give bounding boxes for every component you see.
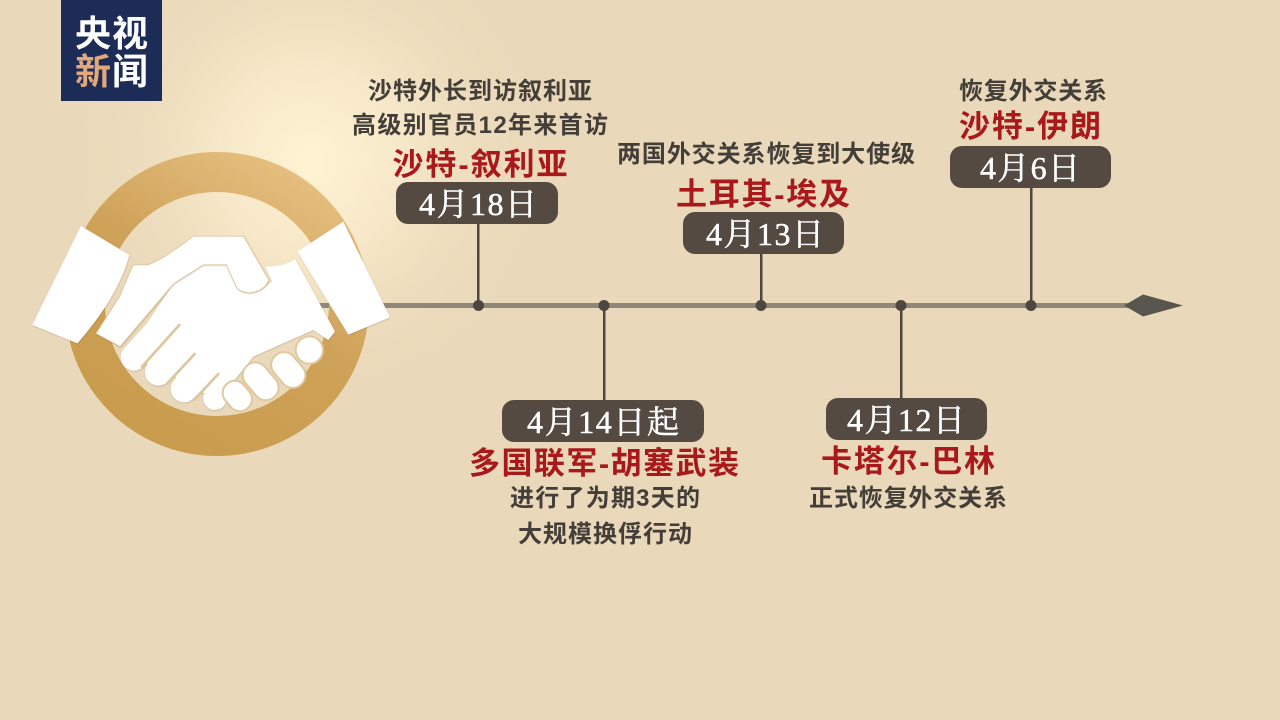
event: Qatar-Bahrain April 12: 4月12日 — [847, 402, 965, 438]
event: Saudi-Iran April 6: 沙特-伊朗 — [959, 109, 1101, 144]
logo: CCTV news — [61, 0, 162, 101]
event: Qatar-Bahrain April 12: 卡塔尔-巴林 — [821, 444, 995, 479]
logo: CCTV news: 新 — [75, 51, 111, 92]
icon: handshake in ring — [32, 172, 390, 436]
event: Turkey-Egypt April 13: 两国外交关系恢复到大使级 — [617, 140, 915, 168]
event: Qatar-Bahrain April 12 — [809, 300, 1007, 512]
event: Coalition-Houthi from April 14: 进行了为期3天的 — [510, 485, 700, 512]
event: Coalition-Houthi from April 14: 4月14日起 — [527, 404, 679, 440]
right cuff — [297, 222, 390, 335]
event: Saudi-Iran April 6 — [950, 77, 1111, 311]
gold ring — [85, 172, 349, 436]
event: Saudi-Syria April 18: 高级别官员12年来首访 — [352, 112, 608, 139]
event: Saudi-Iran April 6: 恢复外交关系 — [959, 77, 1107, 105]
finger slits — [142, 325, 218, 400]
left cuff — [32, 226, 129, 343]
event: Coalition-Houthi from April 14: 多国联军-胡塞武装 — [469, 446, 739, 481]
event: Turkey-Egypt April 13: 土耳其-埃及 — [676, 177, 850, 212]
event: Saudi-Iran April 6: 4月6日 — [980, 150, 1080, 186]
event: Turkey-Egypt April 13 — [617, 140, 915, 311]
timeline axis with arrow — [316, 294, 1183, 316]
background glow — [0, 0, 700, 560]
logo: CCTV news: 央视 — [75, 13, 148, 54]
fingers of upper hand — [218, 336, 323, 416]
event: Saudi-Syria April 18: 4月18日 — [419, 186, 537, 222]
event: Saudi-Syria April 18 — [352, 78, 608, 311]
event: Qatar-Bahrain April 12: 正式恢复外交关系 — [809, 484, 1007, 512]
event: Coalition-Houthi from April 14 — [469, 300, 739, 548]
event: Saudi-Syria April 18: 沙特-叙利亚 — [392, 147, 568, 182]
upper hand with thumb — [97, 237, 268, 346]
event: Turkey-Egypt April 13: 4月13日 — [706, 216, 824, 252]
event: Coalition-Houthi from April 14: 大规模换俘行动 — [518, 521, 692, 548]
logo: CCTV news: 闻 — [112, 51, 148, 92]
event: Saudi-Syria April 18: 沙特外长到访叙利亚 — [368, 78, 592, 105]
lower hand with fingers — [127, 259, 335, 410]
